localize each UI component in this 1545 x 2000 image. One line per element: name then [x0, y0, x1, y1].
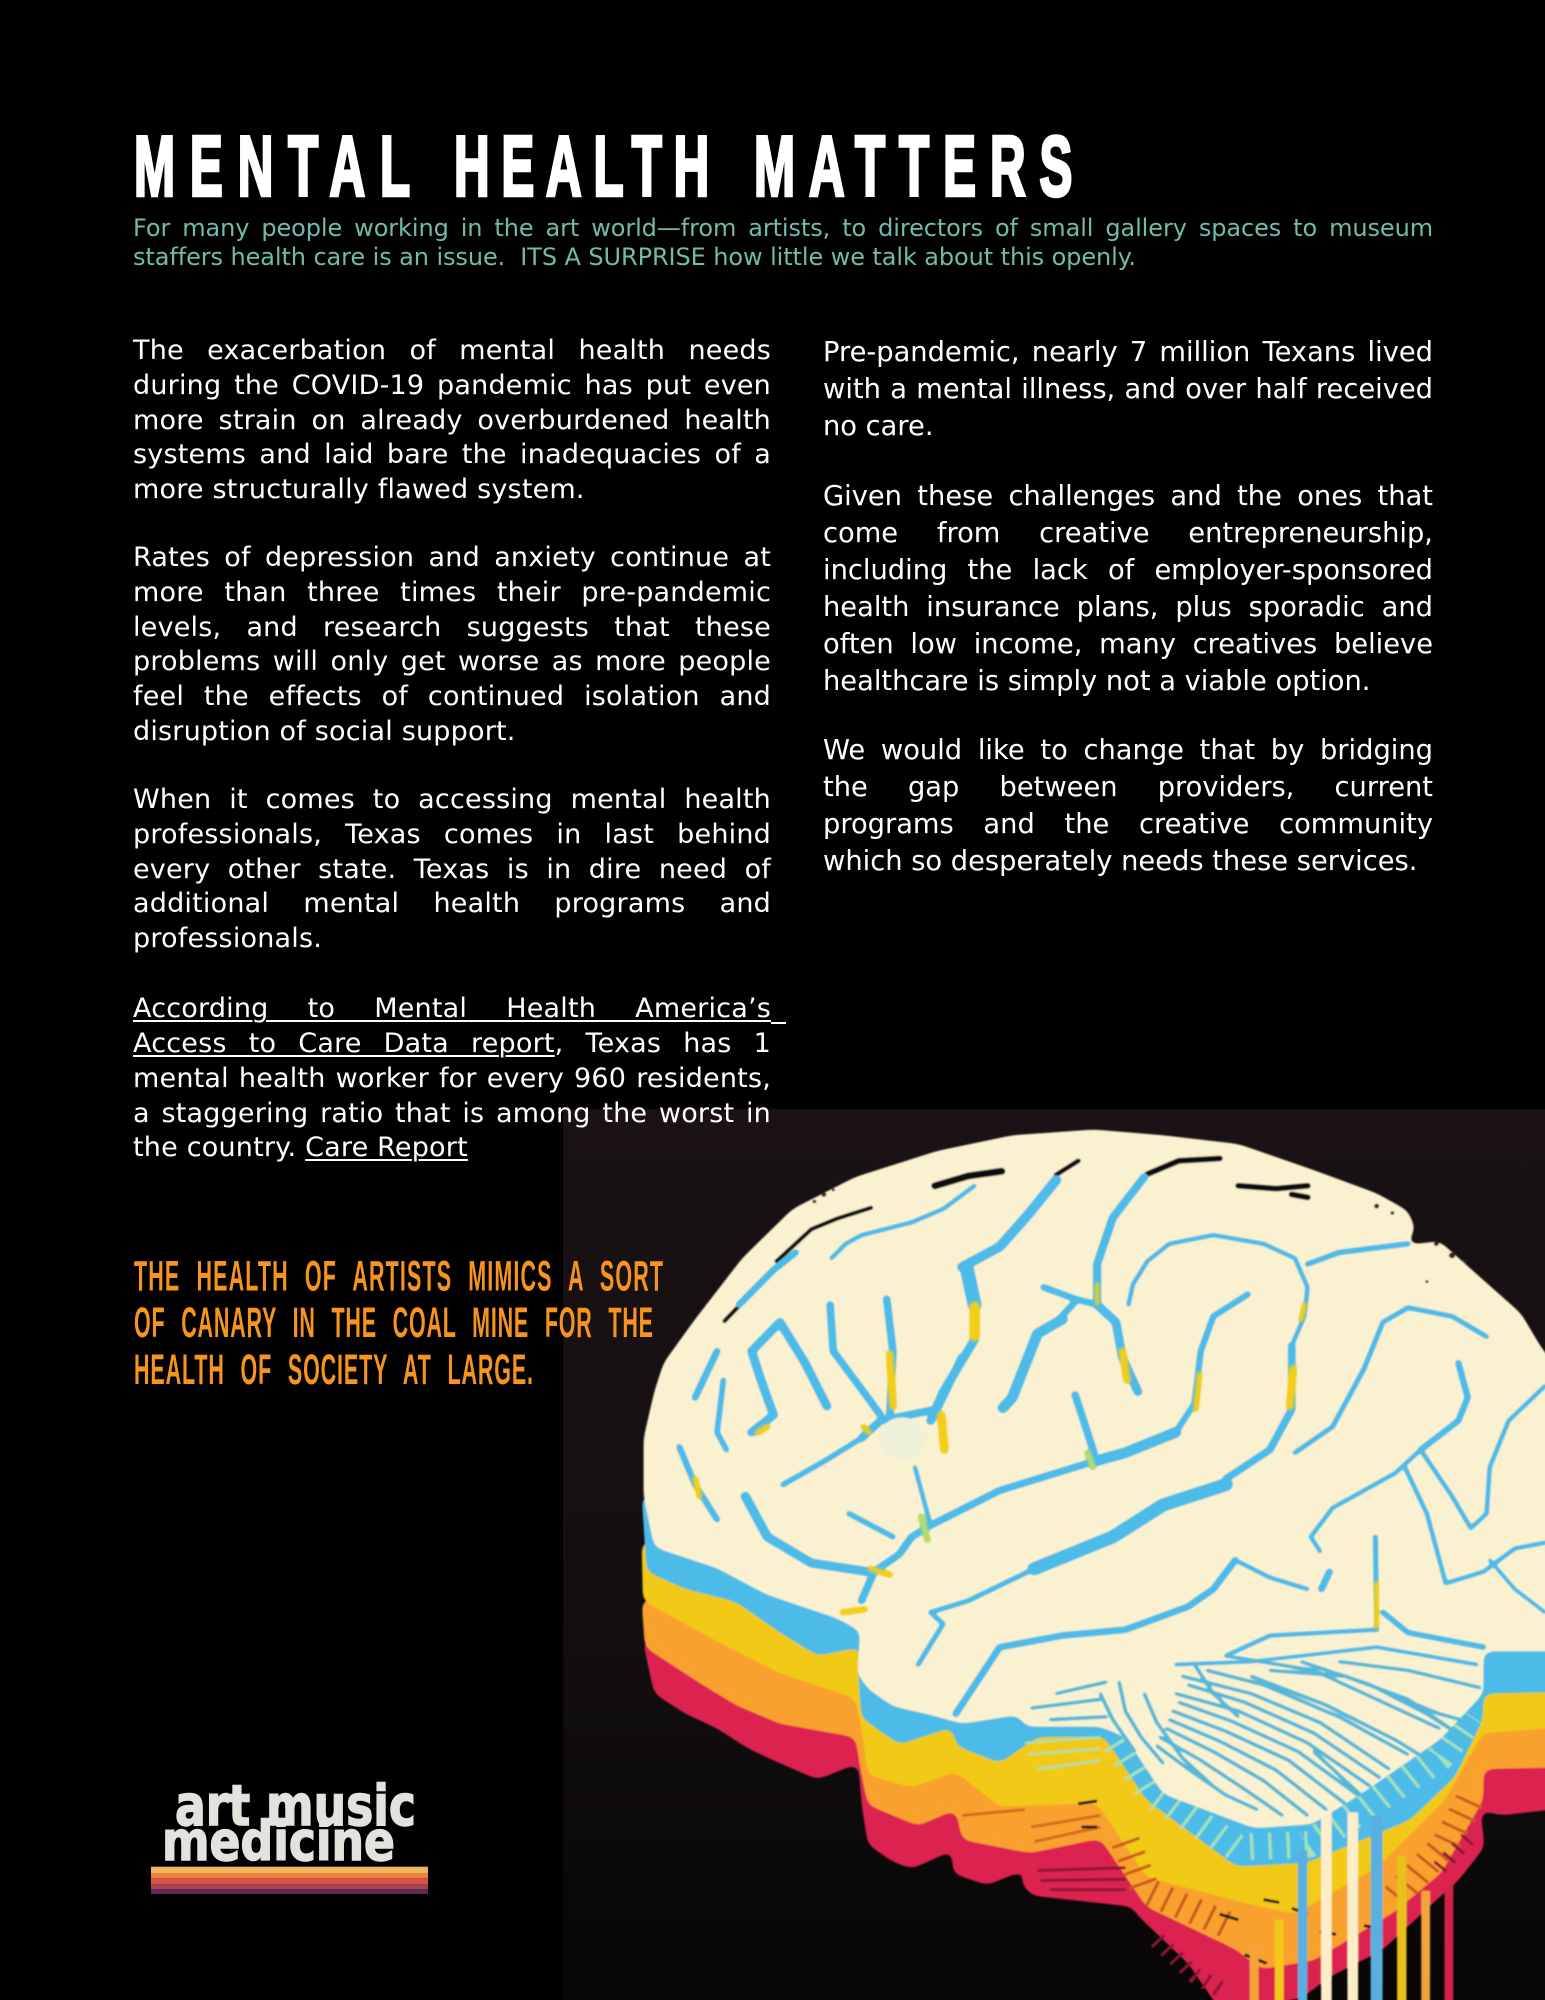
subtitle: [133, 214, 1433, 271]
logo wordmark: [162, 1774, 416, 1873]
left column paragraph 2: problems will only get worse as more people: [133, 646, 771, 677]
left column paragraph 2: levels, and research suggests that these: [133, 612, 771, 643]
blue sulci and yellow accents: [679, 1177, 1545, 1714]
title: [134, 118, 1072, 210]
cerebellum fold stripes in colour layers: [962, 1717, 1474, 1992]
left column paragraph 2: feel the effects of continued isolation and: [133, 681, 771, 712]
left column paragraph 4 with report links: [133, 993, 771, 1163]
left column paragraph 4 with report links: According to Mental Health America’s: [133, 993, 771, 1024]
left column paragraph 1: during the COVID-19 pandemic has put even: [133, 370, 771, 401]
left column paragraph 2: Rates of depression and anxiety continue at: [133, 542, 771, 573]
drips: [1254, 1813, 1449, 2000]
left column paragraph 1: [132, 335, 771, 505]
brain illustration: [563, 1109, 1545, 2000]
left column paragraph 1: The exacerbation of mental health needs: [133, 335, 771, 366]
orange pull quote: HEALTH OF SOCIETY AT LARGE.: [134, 1346, 533, 1394]
specks: [813, 1188, 1466, 1283]
left column paragraph 1: more structurally flawed system.: [133, 474, 585, 505]
cream brain body: [644, 1129, 1545, 1828]
logo: art music medicine: [151, 1774, 428, 1894]
left column paragraph 3: every other state. Texas is in dire need of: [133, 854, 771, 885]
right column paragraph 2: health insurance plans, plus sporadic and: [823, 592, 1433, 623]
blue layer: [642, 1467, 1545, 1867]
right column paragraph 2: often low income, many creatives believe: [823, 629, 1433, 660]
right column paragraph 2: [823, 481, 1433, 697]
orange pull quote: THE HEALTH OF ARTISTS MIMICS A SORT: [134, 1253, 663, 1301]
left column paragraph 4 with report links: mental health worker for every 960 residents,: [133, 1063, 771, 1094]
left column paragraph 1: more strain on already overburdened health: [133, 405, 771, 436]
subtitle: staffers health care is an issue. ITS A SURPRISE how little we talk about this openly.: [133, 243, 1136, 271]
cerebellum folds: [1031, 1656, 1480, 1815]
right column paragraph 1: with a mental illness, and over half received: [823, 374, 1433, 405]
right column paragraph 1: no care.: [823, 411, 934, 442]
left column paragraph 3: When it comes to accessing mental health: [133, 784, 771, 815]
logo wordmark: medicine: [162, 1810, 395, 1873]
left column paragraph 3: professionals, Texas comes in last behind: [133, 819, 771, 850]
left column paragraph 3: professionals.: [133, 923, 322, 954]
right column paragraph 2: Given these challenges and the ones that: [823, 481, 1433, 512]
right column paragraph 3: which so desperately needs these services.: [823, 846, 1417, 877]
image background: [563, 1109, 1545, 2000]
left column paragraph 4 with report links: a staggering ratio that is among the worst in: [133, 1098, 771, 1129]
left column paragraph 2: disruption of social support.: [133, 716, 516, 747]
orange layer: [642, 1554, 1545, 1969]
right column paragraph 3: programs and the creative community: [823, 809, 1433, 840]
pale patch: [878, 1417, 926, 1459]
black creases: [725, 1158, 1308, 1321]
logo stripes: [151, 1867, 428, 1894]
left column paragraph 2: more than three times their pre-pandemic: [133, 577, 771, 608]
orange pull quote: OF CANARY IN THE COAL MINE FOR THE: [134, 1299, 653, 1347]
right column paragraph 2: including the lack of employer-sponsored: [823, 555, 1433, 586]
left column paragraph 1: systems and laid bare the inadequacies of a: [133, 439, 771, 470]
right column paragraph 3: the gap between providers, current: [823, 772, 1433, 803]
right column paragraph 1: Pre-pandemic, nearly 7 million Texans lived: [823, 337, 1433, 368]
right column paragraph 1: [823, 337, 1433, 442]
red layer: [643, 1554, 1545, 2000]
right column paragraph 3: We would like to change that by bridging: [823, 735, 1433, 766]
orange pull quote: [134, 1253, 663, 1394]
subtitle: For many people working in the art world—from artists, to directors of small gallery spaces to museum: [133, 214, 1433, 242]
yellow layer: [642, 1496, 1545, 1914]
right column paragraph 2: healthcare is simply not a viable option.: [823, 666, 1370, 697]
left column paragraph 3: additional mental health programs and: [133, 888, 771, 919]
right column paragraph 2: come from creative entrepreneurship,: [823, 518, 1433, 549]
left column paragraph 3: [133, 784, 772, 954]
left column paragraph 4 with report links: Access to Care Data report, Texas has 1: [133, 1028, 771, 1059]
left column paragraph 4 with report links: the country. Care Report: [133, 1132, 468, 1163]
right column paragraph 3: [823, 735, 1433, 877]
left column paragraph 2: [133, 542, 771, 747]
